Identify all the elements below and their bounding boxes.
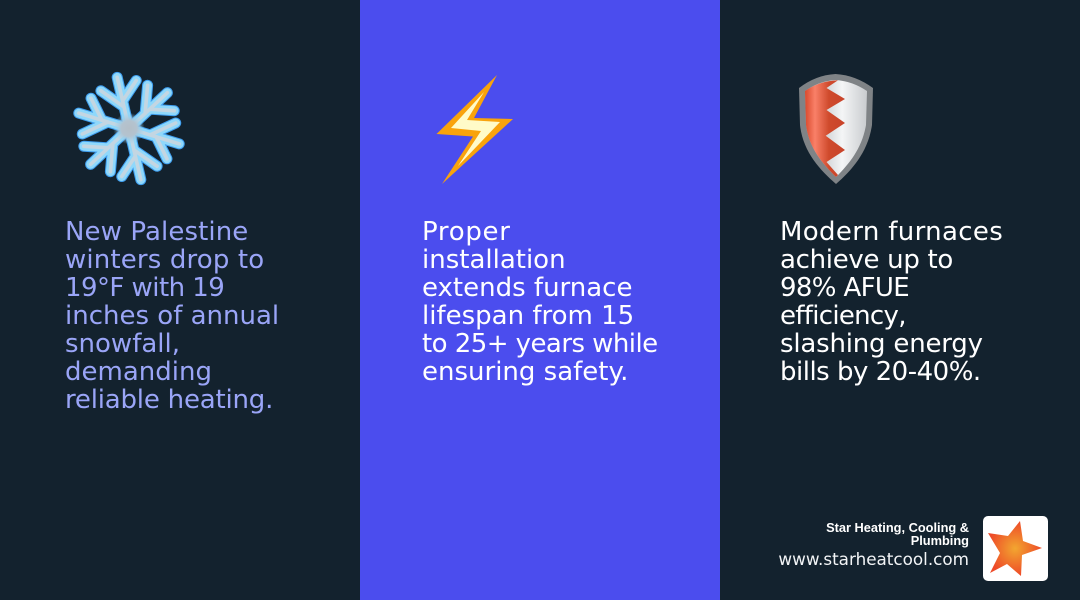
text: winter climate: snowfall, (65, 329, 180, 359)
text: efficiency: slashing energy (780, 329, 983, 359)
panel: winter climate (0, 0, 360, 600)
text: efficiency: bills by 20-40%. (780, 357, 981, 387)
text: winter climate: winters drop to (65, 245, 264, 275)
text: proper installation: ensuring safety. (422, 357, 628, 387)
icon: snowflake (64, 65, 194, 192)
panel: proper installation (360, 0, 720, 600)
text: winter climate: 19°F with 19 (65, 273, 224, 303)
text: winter climate: demanding (65, 357, 212, 387)
text: efficiency: achieve up to (780, 245, 953, 275)
company name: Star Heating, Cooling & (826, 520, 969, 535)
icon: star logo (983, 516, 1048, 581)
text: proper installation: to 25+ years while (422, 329, 658, 359)
text: efficiency (780, 217, 1003, 387)
text: proper installation: extends furnace (422, 273, 632, 303)
text: winter climate: inches of annual (65, 301, 279, 331)
company name: Plumbing (911, 533, 969, 548)
text: proper installation: installation (422, 245, 566, 275)
text: winter climate: reliable heating. (65, 385, 273, 415)
company name (826, 520, 969, 548)
icon: lightning bolt (436, 75, 513, 184)
text: winter climate: New Palestine (65, 217, 248, 247)
panel: efficiency (720, 0, 1080, 600)
text: proper installation (422, 217, 658, 387)
text: proper installation: lifespan from 15 (422, 301, 634, 331)
website url: www.starheatcool.com (778, 549, 969, 569)
text: efficiency: Modern furnaces (780, 217, 1003, 247)
text: winter climate (65, 217, 279, 415)
text: efficiency: efficiency, (780, 301, 906, 331)
text: efficiency: 98% AFUE (780, 273, 909, 303)
icon: shield (799, 74, 873, 184)
text: proper installation: Proper (422, 217, 511, 247)
